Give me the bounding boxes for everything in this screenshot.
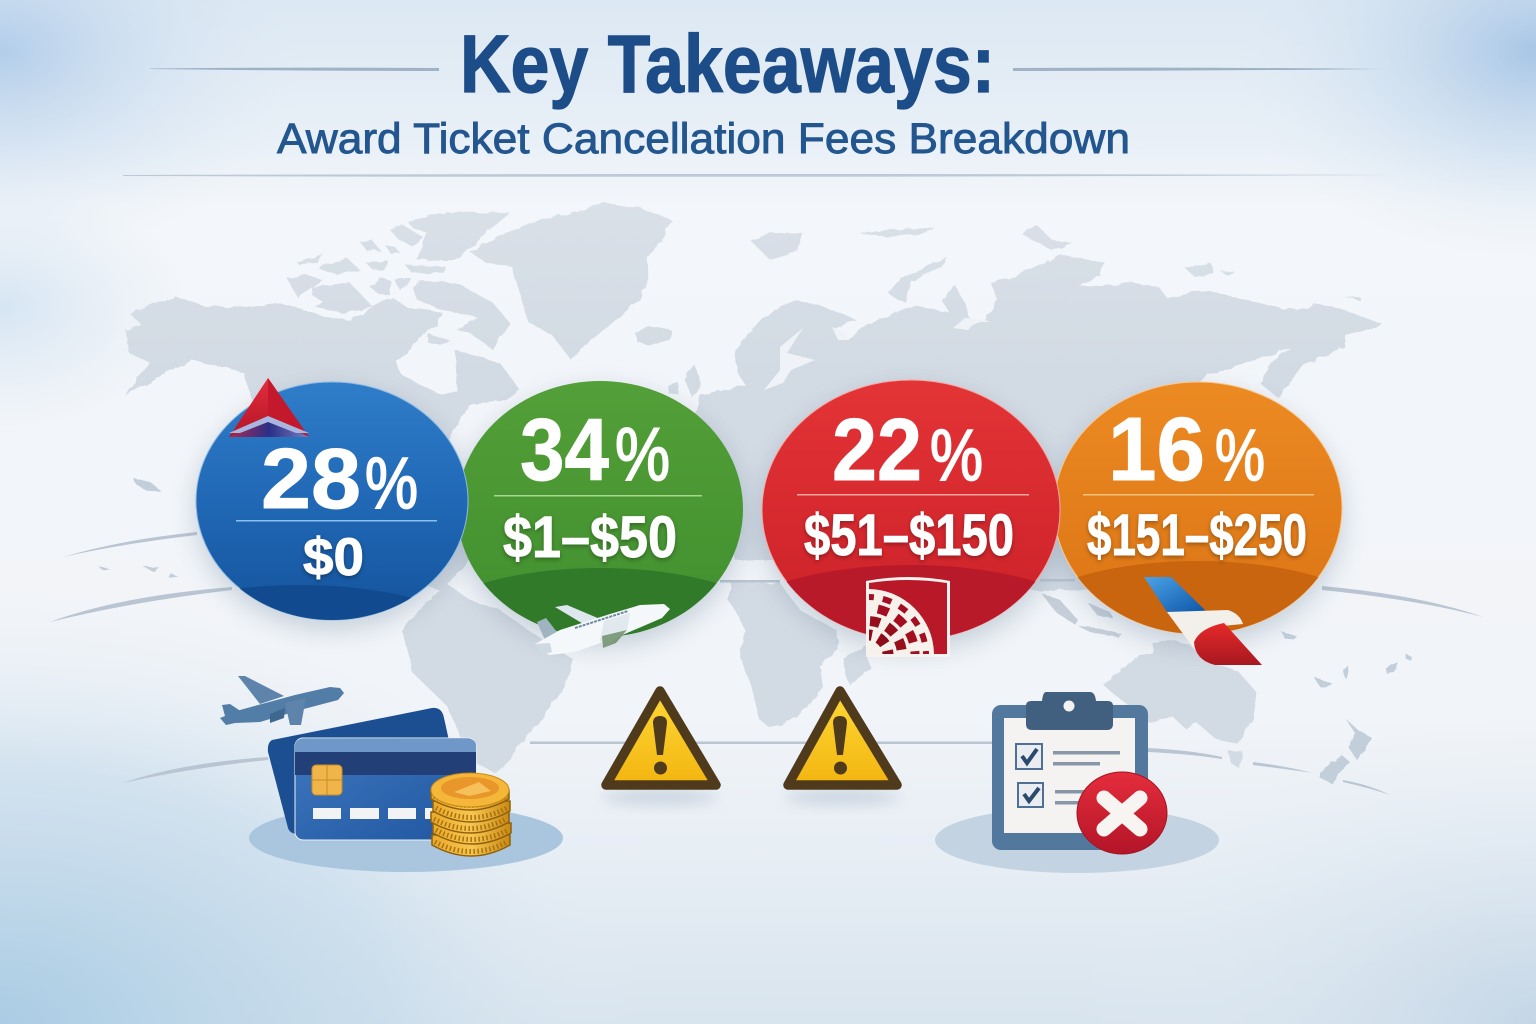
gold coin stack <box>431 773 511 856</box>
front credit card <box>295 738 476 840</box>
bubble: 16% $151-$250 orange: $151–$250 <box>1087 503 1307 568</box>
icon: warning triangle right <box>784 691 900 805</box>
map: Pacific islands <box>98 478 1413 688</box>
world map <box>98 203 1413 783</box>
icon: red white blue tail <box>1144 577 1262 665</box>
map: Greenland <box>470 203 672 360</box>
subtitle: Award Ticket Cancellation Fees Breakdown <box>277 115 1130 163</box>
clipboard clip <box>1026 692 1113 730</box>
bubble: 34% $1-$50 green: $1–$50 <box>503 505 677 570</box>
bubble: 22% $51-$150 red: $51–$150 <box>804 503 1014 568</box>
bubble: 28% $0 blue <box>196 382 468 620</box>
icon: globe airline logo <box>866 577 950 657</box>
bubble: 22% $51-$150 red: 22 <box>832 400 922 499</box>
bubble: 34% $1-$50 green: 34 <box>520 400 609 499</box>
bubble: 28% $0 blue: 28 <box>261 432 361 527</box>
title: Key Takeaways: Key Takeaways: <box>460 19 995 110</box>
clipboard paper <box>1004 718 1135 833</box>
bubble: 22% $51-$150 red: % <box>930 416 983 496</box>
map: Novaya Zemlya <box>888 258 948 303</box>
red cross badge <box>1077 772 1167 854</box>
bubble: 28% $0 blue: $0 <box>303 528 364 587</box>
map: Southeast Asian islands <box>1040 592 1122 637</box>
map: New Zealand <box>1320 718 1372 783</box>
bubble: 34% $1-$50 green: % <box>615 412 670 496</box>
checklist rows <box>1016 744 1120 807</box>
bubble shadows <box>196 390 1342 650</box>
clipboard board <box>992 705 1148 850</box>
map: Arctic islands <box>287 212 510 350</box>
icon: clipboard with red cross <box>935 692 1219 873</box>
bubble: 16% $151-$250 orange: 16 <box>1108 400 1205 500</box>
map: Africa <box>728 583 838 728</box>
map: South America <box>402 583 574 773</box>
globe arcs <box>50 532 1483 795</box>
bubble: 22% $51-$150 red <box>762 380 1060 636</box>
icon: red triangle airline logo <box>229 378 309 437</box>
icon shadow ellipse <box>249 804 563 872</box>
map: Britain and Ireland <box>668 365 702 397</box>
icon: warning triangle left <box>602 691 718 805</box>
icon: white airplane <box>535 604 670 655</box>
bubble: 34% $1-$50 green <box>461 381 743 636</box>
map: Tasmania <box>1227 750 1243 767</box>
map: inland seas <box>764 318 990 390</box>
map: Iceland <box>635 325 672 345</box>
icon: small airplane <box>220 676 344 725</box>
bubble: 28% $0 blue: % <box>365 444 418 524</box>
title rules <box>123 68 1400 177</box>
map: Arctic Eurasia islands <box>750 225 1360 300</box>
icon shadow ellipse <box>935 807 1219 873</box>
bubble: 16% $151-$250 orange: % <box>1215 416 1265 496</box>
map: Madagascar <box>843 645 870 685</box>
map: Eurasia <box>690 255 1384 590</box>
map: North America <box>125 297 520 590</box>
back credit card <box>268 708 450 834</box>
icon: credit cards and coins <box>249 708 563 872</box>
bubble: 16% $151-$250 orange <box>1056 382 1342 634</box>
map: Australia <box>1103 640 1257 743</box>
